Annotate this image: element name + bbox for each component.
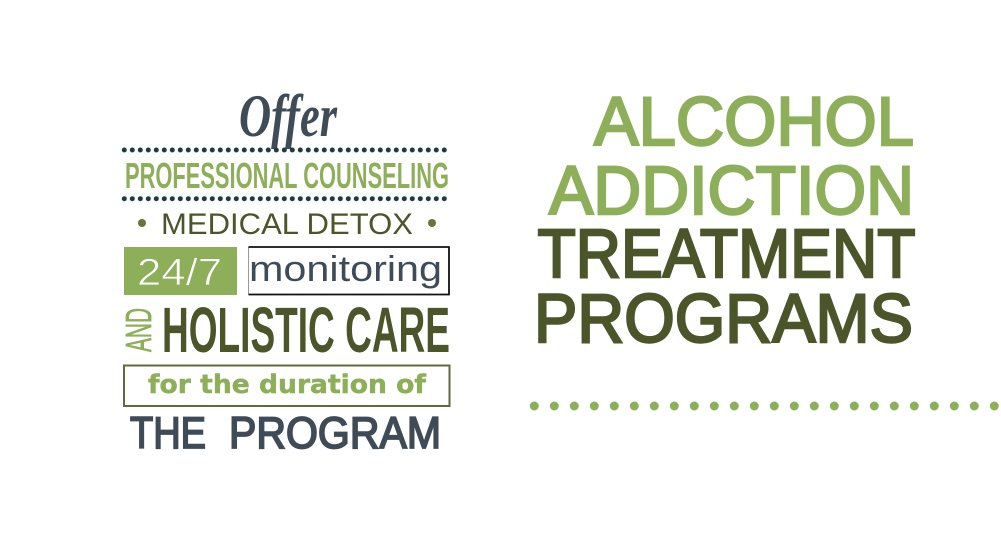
box: for the duration of: for the duration of xyxy=(148,370,427,400)
bullet: left xyxy=(138,219,146,227)
text: medical detox: MEDICAL DETOX xyxy=(161,208,413,241)
dotted divider xyxy=(534,402,995,410)
text: the program: PROGRAM xyxy=(229,409,441,458)
rotated text: and: AND xyxy=(118,308,159,352)
title line: addiction: ADDICTION xyxy=(549,152,914,229)
text: holistic care: HOLISTIC CARE xyxy=(162,294,450,366)
badge: 24/7: 24/7 xyxy=(137,252,222,294)
title line: programs: PROGRAMS xyxy=(534,280,913,357)
title xyxy=(534,83,916,357)
title line: alcohol: ALCOHOL xyxy=(594,83,914,160)
bullet: right xyxy=(428,219,436,227)
box: monitoring: monitoring xyxy=(249,248,442,289)
badge: 24/7 xyxy=(124,247,237,295)
text: the program xyxy=(130,409,441,458)
text: the program: THE xyxy=(130,409,206,458)
panel: offer word stack xyxy=(118,83,450,458)
text: professional counseling: PROFESSIONAL COUNSELING xyxy=(125,155,449,196)
dotted rule: top xyxy=(124,148,445,152)
title line: treatment: TREATMENT xyxy=(538,215,916,292)
dotted rule: bottom xyxy=(124,196,445,201)
box: for the duration of xyxy=(124,366,450,406)
script heading: Offer: Offer xyxy=(239,83,337,149)
